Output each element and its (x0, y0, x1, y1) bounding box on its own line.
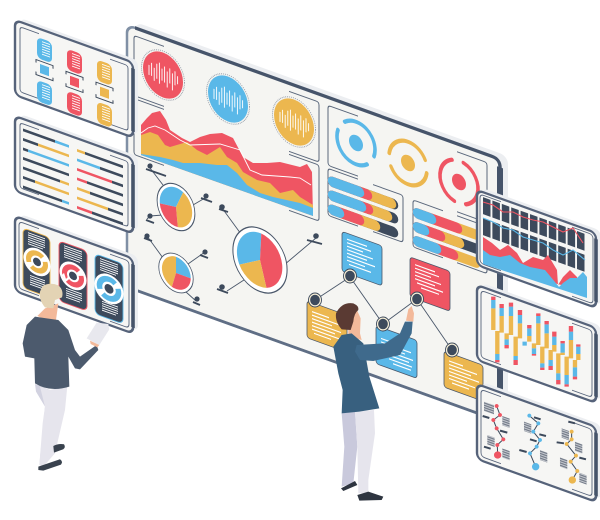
panel: documents screen (15, 16, 138, 139)
panel: ring cards screen (15, 212, 138, 335)
panel: grid and area screen (477, 186, 600, 310)
chart: dark block grid (483, 197, 584, 272)
chart: stacked area chart (141, 111, 313, 216)
chart: blue waveform circle (206, 67, 250, 131)
card: red ring (59, 241, 87, 311)
icon: yellow documents column (96, 59, 113, 128)
chart: right column of lines (77, 150, 123, 224)
chart: red waveform circle (142, 43, 184, 107)
card: yellow ring (23, 228, 50, 298)
chart: left column of lines (23, 130, 69, 203)
connector lines between cards (315, 277, 452, 350)
chart: large pie with pins (217, 204, 322, 301)
chart: yellow waveform circle (272, 90, 316, 154)
chart: stacked bars left (333, 182, 393, 232)
panel: diverging bar screen (477, 281, 600, 405)
chart: blue ring (330, 104, 382, 182)
card: yellow note right (444, 351, 483, 401)
card: yellow note left (307, 301, 347, 352)
panel: progress lines screen (15, 112, 138, 235)
figure: blond man holding tablet (23, 284, 109, 471)
card: blue note lower (376, 326, 417, 378)
card: blue note (342, 231, 382, 286)
icon: blue documents column (36, 37, 53, 107)
figure: man in blue jacket touching screen (333, 303, 414, 501)
chart: pie two with pins (144, 233, 208, 305)
chart: red chain (491, 404, 505, 459)
chart: area with trend lines (483, 202, 587, 298)
chart: stacked bars right (418, 214, 477, 263)
panel: main dashboard board (127, 22, 508, 421)
chart: pie one with pins (146, 163, 212, 236)
icon: connector nodes (308, 269, 458, 357)
card: blue ring (94, 254, 124, 324)
icon: red documents column (66, 48, 83, 117)
card: red note (410, 257, 450, 311)
chart: label blocks (483, 402, 587, 485)
chart: blue chain (527, 414, 542, 470)
chart: yellow ring (386, 130, 430, 196)
chart: red ring (436, 148, 482, 216)
panel: timeline chains screen (477, 380, 600, 504)
chart: yellow chain (565, 430, 579, 484)
chart: diverging stacked bars (493, 297, 578, 387)
